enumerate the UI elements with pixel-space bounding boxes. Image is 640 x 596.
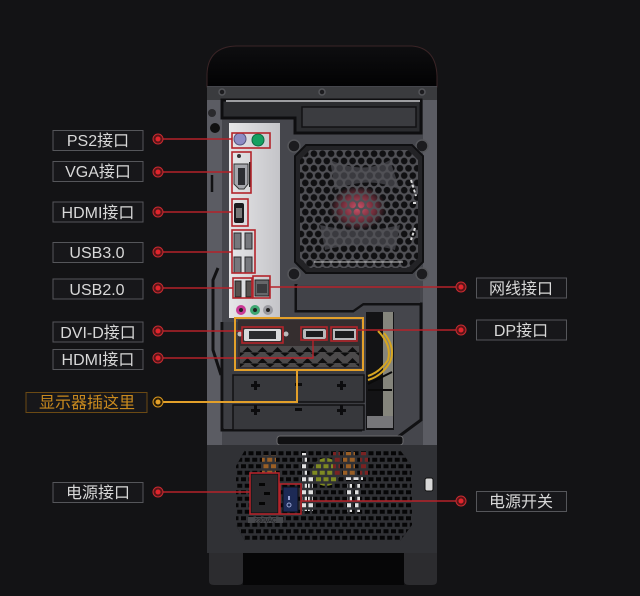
label: 网线接口 xyxy=(270,278,566,298)
label: DVI-D接口: DVI-D接口 xyxy=(60,324,136,342)
audio jacks xyxy=(238,306,272,314)
graphics card bracket xyxy=(238,320,361,368)
empty slot covers xyxy=(233,375,364,430)
label: VGA接口: VGA接口 xyxy=(65,163,131,181)
label: USB3.0: USB3.0 xyxy=(69,245,125,262)
label: PS2接口: PS2接口 xyxy=(67,132,129,150)
label: USB3.0 xyxy=(53,242,232,262)
LAN port xyxy=(255,280,269,296)
drive plate xyxy=(302,107,416,127)
power switch xyxy=(283,487,298,512)
case body xyxy=(207,86,437,553)
lower frame outline xyxy=(222,284,421,437)
DVI port xyxy=(238,329,288,341)
I/O shield xyxy=(229,123,280,318)
base shadow xyxy=(243,553,404,585)
label: card HDMI接口: HDMI接口 xyxy=(62,351,134,369)
bottom slot bar xyxy=(277,436,403,445)
label: 网线接口: 网线接口 xyxy=(489,280,553,298)
case feet xyxy=(209,553,437,585)
callout: 显示器插这里: 显示器插这里 xyxy=(39,394,135,412)
top recess xyxy=(222,100,421,133)
label: 电源接口: 电源接口 xyxy=(66,484,130,502)
red highlight boxes xyxy=(232,133,357,514)
PSU cable bay xyxy=(366,312,394,430)
label: 电源开关 xyxy=(301,492,566,512)
upper expansion plate xyxy=(297,285,420,310)
PSU internals xyxy=(262,452,368,512)
rail highlight xyxy=(226,100,420,102)
PSU mesh plate xyxy=(236,450,412,541)
voltage label xyxy=(248,517,283,524)
label: PS2接口 xyxy=(53,130,232,150)
label: DP接口: DP接口 xyxy=(494,322,548,340)
PSU area xyxy=(207,445,437,553)
label: HDMI接口 xyxy=(53,202,232,222)
top rail with screws xyxy=(207,87,437,100)
USB3 ports xyxy=(234,233,252,273)
HDMI port xyxy=(234,203,244,223)
label: DP接口 xyxy=(357,320,566,340)
DP port xyxy=(333,329,356,340)
power inlet xyxy=(251,474,278,513)
PC case rear xyxy=(207,46,437,585)
label: DVI-D接口 xyxy=(53,322,242,342)
fan grille xyxy=(295,145,423,273)
voltage label: 230VAC xyxy=(255,518,277,524)
expansion slot panel xyxy=(224,322,364,429)
label: 电源接口 xyxy=(53,482,250,502)
label: USB2.0: USB2.0 xyxy=(69,282,125,299)
card HDMI port xyxy=(303,329,326,339)
VGA port xyxy=(234,154,250,189)
left and right edge strips xyxy=(207,100,437,445)
label: VGA接口 xyxy=(53,162,232,182)
side vents xyxy=(212,175,221,375)
label: USB2.0 xyxy=(53,279,233,299)
label: 电源开关: 电源开关 xyxy=(489,493,553,511)
PS2 ports xyxy=(234,133,264,146)
lock slot xyxy=(425,478,433,491)
callout: 显示器插这里 xyxy=(26,318,363,412)
label: HDMI接口: HDMI接口 xyxy=(62,204,134,222)
USB2 ports xyxy=(235,281,252,297)
label: card HDMI接口 xyxy=(53,340,313,370)
top cap xyxy=(207,46,437,87)
panel screws xyxy=(208,109,428,280)
